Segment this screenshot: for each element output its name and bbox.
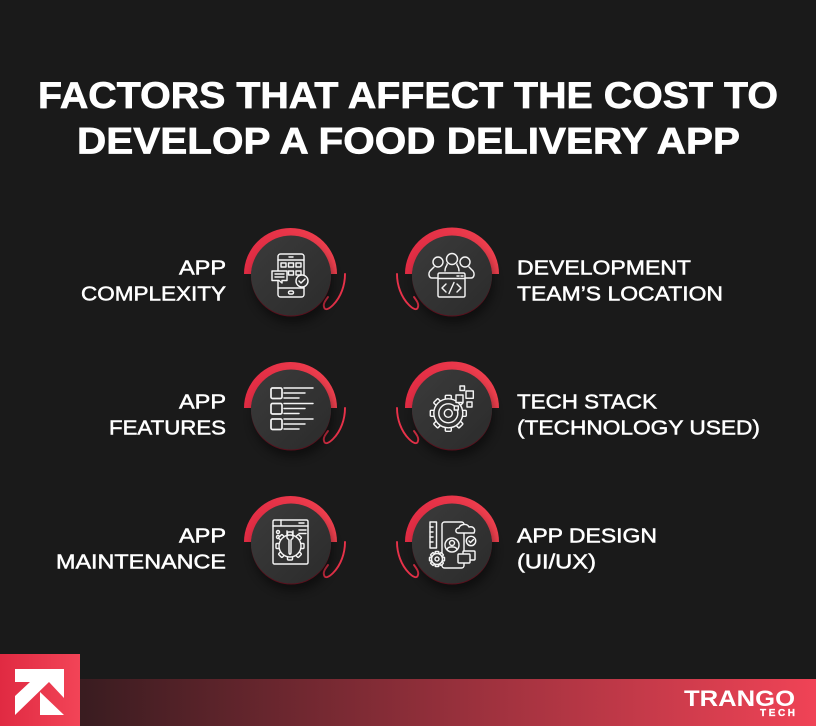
- label: app maintenance: MAINTENANCE: [56, 550, 226, 574]
- label: app complexity: COMPLEXITY: [81, 282, 226, 306]
- icon badge: phone with apps: [244, 228, 345, 323]
- label: app complexity: APP: [179, 256, 226, 280]
- label: app maintenance: [56, 524, 226, 574]
- item: app features: [109, 362, 345, 457]
- title: FACTORS THAT AFFECT THE COST TO: [38, 75, 778, 116]
- item: app design: [397, 496, 657, 591]
- label: development team's location: [517, 256, 723, 306]
- item: app complexity: [81, 228, 345, 323]
- logo wordmark: trango tech: TECH: [760, 708, 795, 719]
- label: tech stack: (TECHNOLOGY USED): [517, 416, 760, 440]
- label: app design: [517, 524, 657, 574]
- icon badge: ui design tools: [397, 496, 499, 591]
- footer gradient bar: [80, 679, 816, 726]
- icon badge: window with gear and wrench: [244, 496, 345, 591]
- label: development team's location: DEVELOPMENT: [517, 256, 692, 280]
- label: app maintenance: APP: [179, 524, 226, 548]
- logo wordmark: trango tech: TRANGO: [684, 686, 795, 711]
- icon badge: team with code window: [397, 228, 499, 323]
- label: tech stack: [517, 390, 760, 440]
- item: tech stack: [397, 362, 760, 457]
- title: [38, 75, 778, 162]
- label: app complexity: [81, 256, 226, 306]
- item: development team's location: [397, 228, 723, 323]
- logo wordmark: trango tech: [684, 686, 795, 719]
- icon badge: checklist: [244, 362, 345, 457]
- logo mark: red square with arrow: [0, 654, 80, 726]
- label: tech stack: TECH STACK: [517, 390, 657, 414]
- label: app features: [109, 390, 226, 440]
- label: app design: (UI/UX): [517, 550, 596, 574]
- label: app features: FEATURES: [109, 416, 226, 440]
- icon badge: gear with blocks: [397, 362, 499, 457]
- title: DEVELOP A FOOD DELIVERY APP: [77, 120, 740, 162]
- label: app features: APP: [179, 390, 226, 414]
- label: development team's location: TEAM’S LOCATION: [517, 282, 723, 306]
- label: app design: APP DESIGN: [517, 524, 657, 548]
- item: app maintenance: [56, 496, 345, 591]
